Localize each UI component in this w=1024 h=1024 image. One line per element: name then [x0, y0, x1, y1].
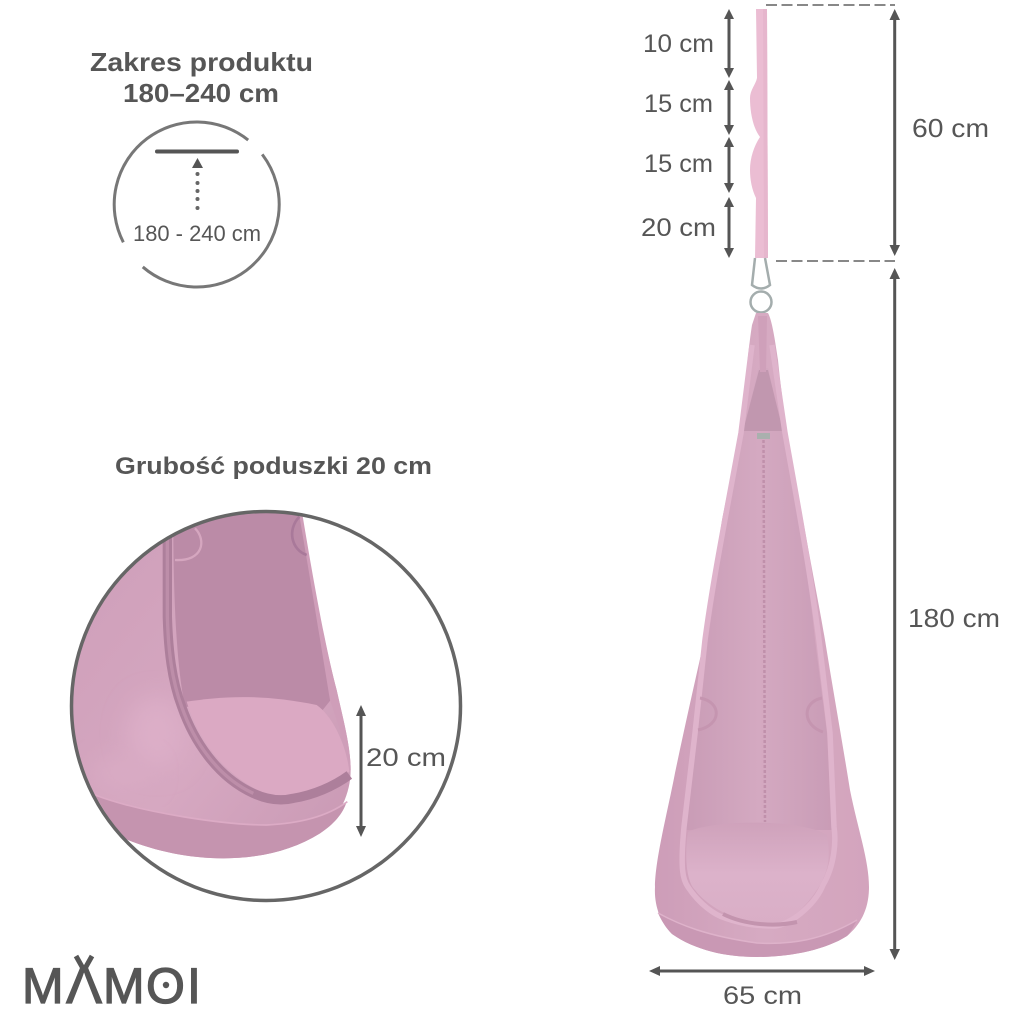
icon: ceiling height range circle: 180 - 240 cm: [133, 221, 261, 246]
brand logo: [22, 955, 201, 1015]
seat cushion: [686, 823, 829, 925]
dashed guide lines: [766, 5, 895, 261]
right handle: [807, 698, 823, 732]
strap segment labels: 20 cm: [641, 214, 716, 242]
heading: cushion thickness: Grubość poduszki 20 cm: [115, 453, 432, 480]
carabiner and ring: [750, 258, 772, 312]
brand logo: I: [187, 958, 201, 1014]
brand logo: O: [146, 958, 185, 1014]
bottom seam: [658, 913, 857, 943]
stitched strap base: [723, 914, 797, 925]
dimension arrow: 65 cm: [649, 966, 875, 1010]
hammock inner back panel: [686, 368, 832, 830]
dimension arrow: 180 cm: 180 cm: [908, 603, 1000, 633]
strap with adjustment loops: [750, 9, 768, 258]
arrow: 20 cm thickness: [356, 705, 366, 837]
upper dark gusset: [743, 370, 783, 431]
left handle: [698, 698, 716, 730]
heading: product range: 180–240 cm: [123, 78, 279, 108]
hammock bottom under seam: [658, 913, 857, 957]
strap segment labels: [641, 30, 716, 242]
brand logo: Λ: [66, 955, 102, 1015]
strap segment labels: 15 cm: [644, 150, 713, 178]
hanging tab: [758, 316, 767, 372]
brand tag: [757, 433, 770, 439]
hammock outer shell: [655, 313, 869, 957]
panel: cushion close-up circle: [60, 500, 460, 900]
heading: product range: Zakres produktu: [90, 47, 313, 77]
brand logo: M: [22, 958, 64, 1014]
edge binding strap: [682, 345, 835, 926]
strap segment labels: 10 cm: [643, 30, 714, 58]
dimension arrow: 60 cm: 60 cm: [912, 113, 989, 143]
heading: product range: [90, 47, 313, 108]
brand logo: M: [103, 958, 145, 1014]
strap segment labels: 15 cm: [644, 90, 713, 118]
panel: cushion close-up circle: 20 cm: [366, 744, 446, 772]
dimension arrow: 60 cm: [890, 9, 989, 256]
centre seam: [764, 440, 765, 822]
strap segment arrows: [724, 9, 734, 258]
icon: ceiling height range circle: [81, 89, 312, 320]
hammock pod: [655, 313, 869, 957]
dimension arrow: 65 cm: 65 cm: [723, 982, 802, 1010]
close-up fabric: [60, 500, 351, 858]
dimension arrow: 180 cm: [890, 268, 1000, 960]
